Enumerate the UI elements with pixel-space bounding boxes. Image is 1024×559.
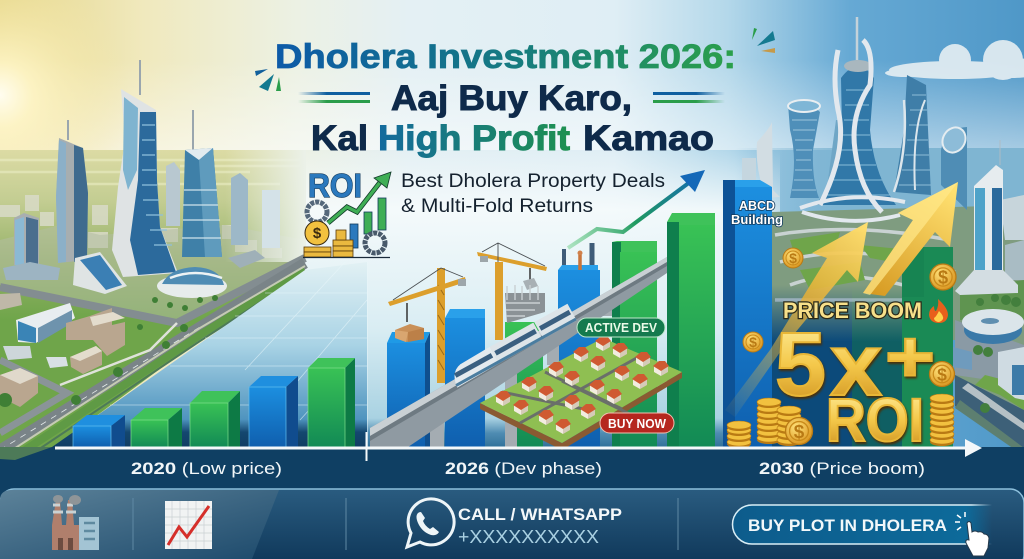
bar 4 [249,376,298,447]
green bar 6 [667,213,715,447]
trees [0,295,218,407]
green bar 5 [612,241,657,447]
middle chart bars [387,180,953,447]
badge: active dev [577,318,665,337]
blue bar 7 [723,180,772,447]
title line 3: High Profit [378,119,570,158]
subtitle: & Multi-Fold Returns [401,196,593,217]
trend arrow [568,170,705,248]
low pavilion [228,250,265,268]
badge: active dev: ACTIVE DEV [585,320,657,335]
ROI icon: ROI [308,167,362,204]
tower: left tall [56,138,88,263]
pillars [430,296,612,447]
coins [727,248,956,448]
crane right [477,243,547,340]
loose coin: $ [789,250,797,266]
tower: short [14,213,39,265]
timeline labels: 2020 (Low price) [131,459,282,478]
right tower cluster [742,17,1024,413]
timeline labels [131,459,925,478]
sparkle left [255,69,281,91]
blue bar 1 [387,332,430,447]
gear top [307,202,327,222]
icon: factory [52,495,99,550]
treeline [973,294,1021,413]
loose coin [930,362,954,386]
loose coin: $ [938,268,948,287]
icon: flame [929,299,948,323]
5x+ ROI headline: x [830,315,882,414]
contact text: +XXXXXXXXXX [458,527,599,547]
title line 3 [311,119,714,158]
5x+ ROI headline: 5 [775,315,826,415]
button: buy plot: BUY PLOT IN DHOLERA [748,516,947,535]
label: ABCD Building: ABCD [739,199,775,213]
title [275,38,736,158]
coin stacks [727,394,954,448]
lower left blocks [0,293,218,407]
houses [495,336,669,434]
sparkle right [752,28,775,53]
dark bars behind gold [772,247,953,447]
tan buildings [66,308,125,356]
pale far tower [757,122,780,198]
tower: main [112,89,178,277]
podium [3,262,60,280]
viaduct deck [370,257,667,447]
subtitle: Best Dholera Property Deals [401,171,665,192]
bar 3 [190,391,240,447]
price boom label: PRICE BOOM [783,298,922,323]
icon: whatsapp [407,499,454,547]
loose coin [783,248,803,268]
front coin: $ [794,422,805,443]
badge: buy now: BUY NOW [608,416,667,431]
label: ABCD Building [731,199,783,227]
low buildings [953,347,972,370]
front coin [786,418,812,444]
5x+ ROI headline: ROI [826,386,924,454]
clouds on right [885,40,1024,80]
5x+ ROI headline [775,315,935,454]
title line 2: Aaj Buy Karo, [391,79,632,118]
contact text: CALL / WHATSAPP [458,506,622,524]
loose coin [930,264,956,290]
sun glow [0,0,160,240]
back tower [826,120,845,195]
footer panel [0,489,1024,559]
concrete block [523,278,538,290]
tower: pale right [262,190,280,248]
tan block [0,368,38,407]
ROI icon [303,167,391,258]
fade to haze [225,150,306,262]
loose coin: $ [937,364,947,384]
left tower cluster [3,60,280,298]
left chart panel [52,262,368,447]
ring road around base [800,197,905,221]
right curved tower [941,127,967,210]
badge: buy now [600,413,674,433]
plot roads [502,355,642,423]
right city ground [772,195,1024,456]
small pavilions [46,357,68,368]
label: ABCD Building: Building [731,213,783,227]
bar 5 [308,358,355,447]
contact text [458,506,622,547]
glass dome [157,274,227,298]
bars [350,198,386,248]
gold arrows [725,182,958,417]
tower: blue prism [182,148,222,257]
button: buy plot [732,505,992,544]
timeline axis [55,432,982,461]
5x+ ROI headline: + [885,317,935,397]
loose coin: $ [749,334,757,350]
footer background navy [0,447,1024,559]
train [448,304,577,388]
left city ground [0,150,306,462]
blue bar 4 [558,265,600,447]
bottom-left ground wedge [0,447,52,460]
glass wedge [73,252,127,294]
building under construction [505,285,545,323]
coin stacks [304,230,353,257]
title rules [298,92,725,103]
dollar coin: $ [313,225,322,242]
right sail tower [894,75,931,195]
central light background [300,150,780,448]
twisted tower [788,102,820,198]
side tower [974,165,1003,275]
crane left [388,268,466,383]
title line 1: Dholera Investment 2026: [275,38,736,76]
icon: rising chart [165,501,212,549]
blue floor [52,262,367,447]
plot map [480,336,682,450]
gear right [365,233,385,253]
green arrow [328,172,391,223]
plot slab [480,372,682,450]
icon: hand cursor [966,522,989,556]
central tower [816,66,896,205]
green bar 3 [505,322,543,447]
timeline labels: 2026 (Dev phase) [445,459,602,478]
bar 1 [73,415,125,447]
loose coin [743,332,763,352]
lower-left roads [0,258,305,323]
bar 2 [131,408,182,447]
title line 3: Kal [311,119,368,158]
timeline labels: 2030 (Price boom) [759,459,925,478]
workers on top of bar [564,243,592,270]
stadium [962,309,1024,344]
title line 3: Kamao [583,119,714,158]
tower: mid [231,173,248,245]
pale small blocks [742,158,756,183]
rail viaduct and train [370,257,667,447]
tower: pale far [166,162,180,226]
side tower base [955,270,1018,295]
subtitle [401,171,665,217]
blue office [16,303,75,343]
sea on right horizon [735,148,1024,223]
spires [68,60,193,150]
horizon haze [0,60,1024,150]
hanging boxes [395,324,424,342]
blue bar 2 [445,309,485,447]
